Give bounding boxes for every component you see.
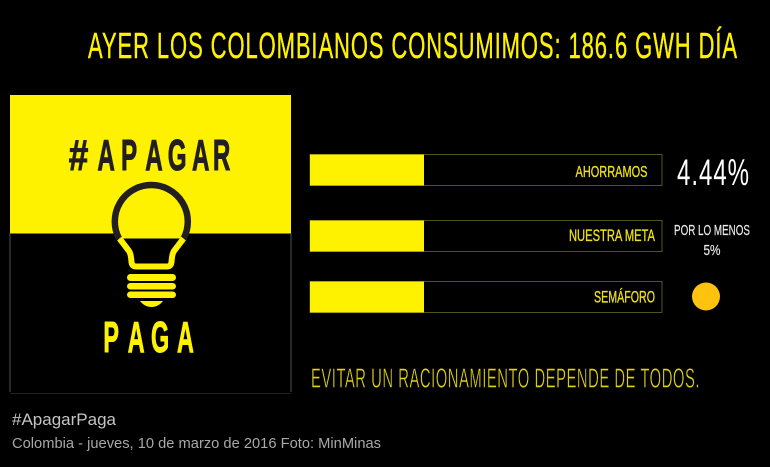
logo text: #APAGAR: APAGAR bbox=[97, 130, 230, 180]
target text: por lo menos 5%: 5% bbox=[704, 242, 720, 259]
target text: por lo menos 5% bbox=[674, 222, 750, 259]
logo yellow upper half bbox=[10, 95, 291, 234]
panel: bar semaforo bbox=[310, 282, 662, 312]
panel: bar ahorramos: AHORRAMOS bbox=[576, 164, 648, 181]
icon: light bulb bbox=[115, 185, 188, 307]
panel: bar ahorramos bbox=[310, 154, 662, 186]
icon: traffic light dot bbox=[692, 282, 720, 310]
panel: apagar paga logo bbox=[10, 95, 291, 394]
panel: bar nuestra meta: NUESTRA META bbox=[569, 226, 655, 245]
panel: bar semaforo: SEMÁFORO bbox=[594, 288, 655, 306]
logo text: #APAGAR: # bbox=[69, 131, 88, 180]
caption credit: Colombia - jueves, 10 de marzo de 2016 Foto: MinMinas bbox=[12, 435, 381, 452]
logo text: PAGA: PAGA bbox=[103, 313, 194, 362]
panel: bar nuestra meta bbox=[310, 220, 662, 252]
caption heading: #ApagarPaga bbox=[12, 410, 117, 429]
logo black lower half with thin border bbox=[10, 234, 291, 394]
